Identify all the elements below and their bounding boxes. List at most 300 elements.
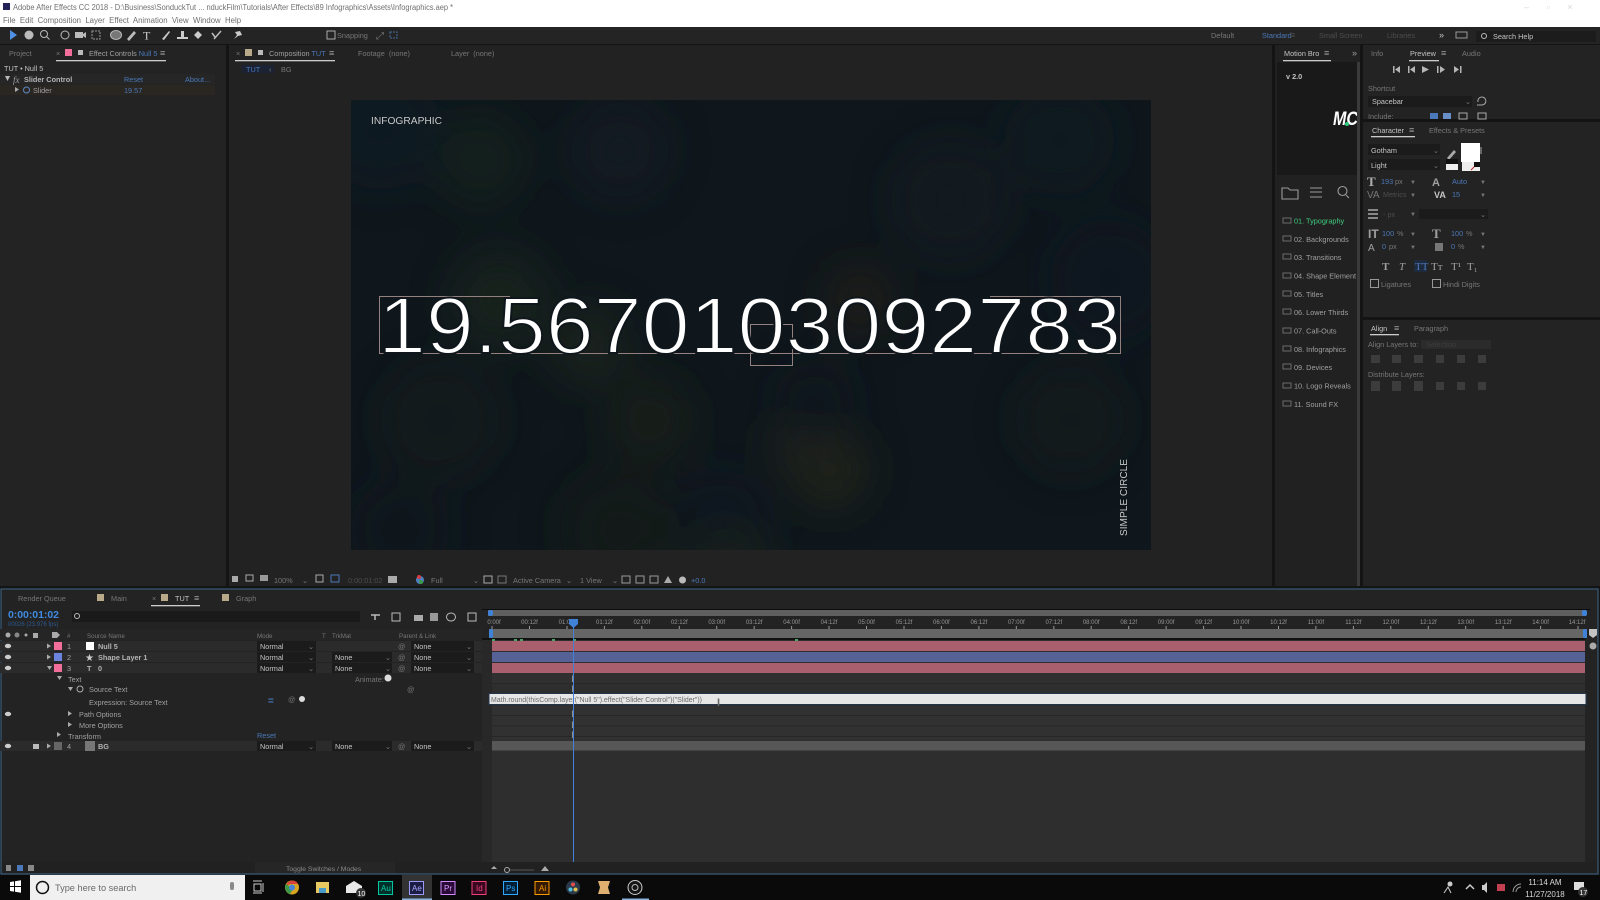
column headers: Mode [257, 633, 273, 640]
tabs: Preview [1410, 49, 1437, 58]
mail: 10 [358, 891, 365, 898]
layer tab: Layer (none) [451, 49, 494, 58]
tabs: Info [1371, 49, 1383, 58]
app: indesign: Id [476, 884, 483, 893]
time ruler: 12:12f [1420, 620, 1437, 626]
composition tab: × [236, 49, 240, 58]
panel: effect controls: About... [185, 75, 210, 84]
stroke row [1368, 209, 1488, 219]
time ruler: 05:00f [858, 620, 875, 626]
column headers: T [322, 633, 326, 640]
layer 4: bg: ⌄ [385, 742, 391, 751]
property rows: Text [68, 675, 81, 684]
keyframe markers: I [572, 730, 574, 740]
type style buttons: T₁ [1467, 261, 1478, 273]
viewer controls: 0:00:01:02 [348, 576, 382, 585]
expression field [489, 694, 1586, 704]
size and leading: T [1367, 174, 1376, 189]
time ruler: 14:00f [1532, 620, 1549, 626]
viewer controls: Full [431, 576, 443, 585]
type style buttons: T [1382, 261, 1390, 273]
size and leading: ▼ [1410, 193, 1416, 199]
layer 2: shape layer 1 [0, 652, 482, 664]
timeline tabs: ≡ [194, 593, 199, 603]
column headers [0, 629, 482, 640]
taskbar [0, 875, 1600, 900]
chrome [285, 880, 299, 894]
property rows: Path Options [79, 710, 122, 719]
layer 3: text layer: 0 [98, 664, 102, 673]
slider control row [0, 74, 215, 84]
layer 1: null 5 [0, 641, 482, 651]
time ruler: 08:00f [1083, 620, 1100, 626]
panel: preview: ⌄ [1465, 97, 1471, 106]
time ruler: 00:12f [521, 620, 538, 626]
layer 1: null 5: Null 5 [98, 642, 118, 651]
layer 3: text layer: ⌄ [466, 664, 472, 673]
timeline tabs: Render Queue [18, 594, 66, 603]
keyframe markers: I [572, 684, 574, 694]
app: gold tile [598, 881, 610, 894]
tabs [1371, 48, 1481, 61]
tabs [1371, 125, 1485, 137]
template list: 09. Devices [1294, 363, 1332, 372]
layer 1: null 5: None [414, 642, 431, 651]
tabs: ≡ [1394, 323, 1399, 333]
colour swatches [1446, 143, 1482, 171]
layer 3: text layer: None [335, 664, 352, 673]
composition tab [235, 48, 335, 61]
layer 2: shape layer 1: ⌄ [308, 653, 314, 662]
keyframe markers: I [572, 720, 574, 730]
big number: 19.5670103092783 [378, 281, 1121, 370]
scale rows: ▼ [1410, 245, 1416, 251]
scale rows: 0 [1451, 242, 1455, 251]
viewer controls: ⌄ [473, 576, 479, 585]
template list: 04. Shape Element [1294, 272, 1356, 280]
type style buttons [1382, 260, 1478, 273]
app: illustrator: Ai [539, 884, 546, 893]
breadcrumb [242, 65, 292, 74]
viewer controls: ⌄ [302, 576, 308, 585]
size and leading: ▼ [1480, 180, 1486, 186]
property rows: More Options [79, 721, 123, 730]
property rows: Transform [68, 732, 101, 741]
template list: 10. Logo Reveals [1294, 382, 1351, 390]
expression field: Math.round(thisComp.layer("Null 5").effect("Slider Control")("Slider")) [491, 695, 702, 704]
layer 4: bg: Normal [260, 742, 284, 751]
breadcrumb: BG [281, 65, 292, 74]
size and leading: 193 [1381, 177, 1393, 186]
panel: align: Selection [1426, 340, 1456, 349]
breadcrumb: TUT [246, 65, 261, 74]
timeline tabs: Main [111, 594, 127, 603]
time ruler: 0:00f [487, 620, 501, 626]
scale rows [1368, 226, 1486, 254]
layer bars [492, 641, 1585, 750]
stroke row: - px [1383, 210, 1396, 219]
size and leading: VA [1434, 190, 1446, 200]
distribute layers: Distribute Layers: [1368, 370, 1425, 379]
tool icons [1282, 186, 1349, 199]
time navigator [482, 609, 1590, 616]
tab: » [1352, 48, 1357, 58]
template list: 05. Titles [1294, 290, 1324, 299]
size and leading: Metrics [1383, 190, 1407, 199]
top toolbar [0, 27, 1600, 44]
comp viewer: blurred bokeh background [351, 100, 1151, 550]
template list: 06. Lower Thirds [1294, 308, 1349, 317]
viewer controls: +0.0 [691, 576, 705, 585]
viewer controls: 1 View [580, 576, 602, 585]
column headers: Parent & Link [399, 633, 437, 640]
scale rows: % [1397, 229, 1404, 238]
layer 4: bg: ⌄ [466, 742, 472, 751]
property rows: Animate: [355, 675, 384, 684]
top toolbar: Search Help [1493, 32, 1533, 41]
system tray: 11/27/2018 [1525, 890, 1565, 899]
layer 2: shape layer 1: Shape Layer 1 [98, 653, 147, 662]
layer 3: text layer: ⌄ [308, 664, 314, 673]
top toolbar: Small Screen [1319, 31, 1362, 40]
notifications [1574, 882, 1584, 890]
search box: Type here to search [55, 883, 136, 893]
panel: character: ⌄ [1433, 161, 1439, 170]
panel: timeline [0, 589, 1598, 874]
viewer controls: ⌄ [566, 576, 572, 585]
tab [1283, 48, 1357, 61]
time ruler [487, 620, 1586, 629]
time ruler: 08:12f [1120, 620, 1137, 626]
time ruler: 01:00f [559, 620, 576, 626]
layer outlines [380, 296, 1120, 366]
layer path: TUT • Null 5 [4, 64, 43, 73]
type style buttons: T [1399, 261, 1406, 273]
viewer controls: Active Camera [513, 576, 562, 585]
tool icons [10, 28, 242, 42]
tool icons: T [143, 28, 151, 42]
scale rows: % [1466, 229, 1473, 238]
layer 2: shape layer 1: ★ [85, 653, 94, 664]
property rows: @ [407, 685, 414, 694]
bottom status bar [2, 862, 1597, 873]
tab: ≡ [1324, 48, 1329, 58]
time ruler: 13:00f [1457, 620, 1474, 626]
time ruler: 06:00f [933, 620, 950, 626]
layer 4: bg: @ [398, 742, 405, 751]
scale rows: IT [1368, 227, 1379, 241]
scale rows: % [1458, 242, 1465, 251]
bottom status bar: Toggle Switches / Modes [286, 866, 362, 873]
time ruler: 04:00f [783, 620, 800, 626]
snapping [327, 31, 335, 39]
timeline tabs: Graph [236, 594, 256, 603]
layer 3: text layer [0, 663, 482, 673]
logo area [1277, 62, 1357, 175]
size and leading: Auto [1452, 177, 1467, 186]
time ruler: 06:12f [971, 620, 988, 626]
time ruler: 02:12f [671, 620, 688, 626]
effect controls tab: Effect Controls Null 5 [89, 49, 157, 58]
time ruler: 04:12f [821, 620, 838, 626]
search box [30, 875, 245, 900]
layer 4: bg: None [414, 742, 431, 751]
timeline tabs: × [152, 594, 156, 603]
column headers: Source Name [87, 633, 125, 640]
layer 3: text layer: 3 [67, 664, 71, 673]
panel: character: Hindi Digits [1443, 280, 1480, 289]
start button [10, 880, 21, 893]
font weight [1368, 159, 1440, 170]
panel: effect controls: 19.57 [124, 86, 142, 95]
panel: character: Light [1371, 161, 1387, 170]
layer 2: shape layer 1: @ [398, 653, 405, 662]
app: obs [622, 880, 649, 900]
panel: character: Ligatures [1381, 280, 1411, 289]
brand: simple circle: SIMPLE CIRCLE [1118, 459, 1130, 536]
effect controls tab: × [56, 49, 60, 58]
track area [482, 640, 1585, 862]
property rows: Reset [257, 731, 276, 740]
scrollbar [1357, 62, 1360, 586]
system tray [1444, 878, 1588, 899]
viewer controls [232, 575, 705, 585]
panel: effect controls: Slider [33, 86, 52, 95]
align layers to: Align Layers to: [1368, 340, 1418, 349]
include: Include: [1368, 112, 1394, 121]
effect controls tab [56, 48, 166, 61]
version: v 2.0 [1286, 72, 1302, 81]
mail [346, 881, 366, 898]
top toolbar: Standard [1262, 31, 1292, 40]
font family [1368, 144, 1440, 155]
scale rows: ▼ [1480, 245, 1486, 251]
template list: 02. Backgrounds [1294, 235, 1349, 244]
layer 2: shape layer 1: None [335, 653, 352, 662]
time ruler: 01:12f [596, 620, 613, 626]
panel: character: ⌄ [1433, 146, 1439, 155]
panel: character [1363, 122, 1600, 317]
property rows [5, 674, 414, 741]
panel: effect controls: fx [13, 75, 20, 85]
distribute icons [1371, 381, 1486, 391]
layer 2: shape layer 1: None [414, 653, 431, 662]
time ruler: 12:00f [1382, 620, 1399, 626]
time ruler: 09:12f [1195, 620, 1212, 626]
playhead [569, 619, 578, 862]
property rows: @ [288, 695, 295, 704]
layer 1: null 5: ⌄ [466, 642, 472, 651]
panel: effect controls [0, 45, 226, 586]
workspaces: Default [1211, 31, 1234, 40]
transport controls [1393, 66, 1462, 73]
system tray: 17 [1580, 890, 1587, 897]
time ruler: 03:12f [746, 620, 763, 626]
top toolbar: » [1439, 30, 1444, 40]
template list: 01. Typography [1294, 216, 1345, 226]
right edge markers [1589, 629, 1597, 650]
layer 2: shape layer 1: ⌄ [466, 653, 472, 662]
scale rows: ▼ [1410, 232, 1416, 238]
template list: 03. Transitions [1294, 253, 1342, 262]
tabs: Effects & Presets [1429, 126, 1485, 135]
keyframe markers [572, 674, 574, 740]
layer 1: null 5: ⌄ [308, 642, 314, 651]
align icons [1371, 355, 1486, 363]
stroke row: ⌄ [1480, 210, 1486, 219]
app: resolve [566, 880, 580, 894]
top toolbar: Libraries [1387, 31, 1415, 40]
stroke row: ▼ [1410, 212, 1416, 218]
property rows: = [268, 696, 274, 707]
layer 4: bg: ⌄ [308, 742, 314, 751]
composition tab: ≡ [329, 48, 334, 58]
time ruler: 09:00f [1158, 620, 1175, 626]
size and leading: VA [1367, 190, 1380, 201]
scale rows: 0 [1382, 242, 1386, 251]
search help [1476, 31, 1596, 42]
column headers: # [67, 633, 71, 640]
layer 2: shape layer 1: ⌄ [385, 653, 391, 662]
layer search [72, 611, 360, 622]
viewer controls: 100% [274, 576, 293, 585]
layer 3: text layer: @ [398, 664, 405, 673]
keyframe markers: I [572, 709, 574, 719]
file explorer [316, 882, 329, 893]
ligatures option [1370, 280, 1378, 288]
tabs: ≡ [1409, 125, 1414, 135]
layer 4: bg: None [335, 742, 352, 751]
project tab: Project [9, 49, 32, 58]
slider row [0, 85, 215, 95]
template list: 08. Infographics [1294, 345, 1346, 354]
column headers: TrkMat [332, 633, 351, 640]
layer 4: bg: BG [98, 742, 109, 751]
scale rows: T [1432, 226, 1441, 241]
type style buttons: T¹ [1451, 261, 1461, 273]
panel: composition [229, 45, 1272, 615]
layer 3: text layer: Normal [260, 664, 284, 673]
scale rows: 100 [1451, 229, 1463, 238]
top toolbar: Snapping [337, 31, 368, 40]
keyframe markers: I [572, 674, 574, 684]
viewer controls: ⌄ [612, 576, 618, 585]
time ruler: 05:12f [896, 620, 913, 626]
type style buttons: TT [1415, 261, 1429, 273]
property rows: Expression: Source Text [89, 698, 168, 707]
time ruler: 14:12f [1569, 620, 1586, 626]
size and leading: ▼ [1410, 180, 1416, 186]
panel: preview: Spacebar [1372, 97, 1404, 106]
size and leading: ▼ [1480, 193, 1486, 199]
tabs [1370, 323, 1448, 335]
app: photoshop: Ps [506, 884, 515, 893]
panel: effect controls: Reset [124, 75, 143, 84]
size and leading: 15 [1452, 190, 1460, 199]
timeline tabs: TUT [175, 594, 190, 603]
layer 2: shape layer 1: Normal [260, 653, 284, 662]
panel: character: Gotham [1371, 146, 1397, 155]
layer 1: null 5: 1 [67, 642, 71, 651]
app: after effects [402, 875, 432, 900]
size and leading: A [1432, 177, 1440, 189]
current time: 0:00:01:02 [8, 609, 59, 621]
template list: 11. Sound FX [1294, 400, 1338, 409]
template list: 07. Call-Outs [1294, 326, 1337, 336]
time ruler: 11:00f [1308, 620, 1324, 626]
layer 1: null 5: Normal [260, 642, 284, 651]
type style buttons: Tт [1431, 261, 1443, 273]
time ruler: 03:00f [708, 620, 725, 626]
scale rows: px [1389, 242, 1397, 251]
template list [1283, 216, 1356, 409]
time ruler: 13:12f [1495, 620, 1512, 626]
scale rows: A [1368, 243, 1375, 254]
size and leading [1367, 174, 1486, 201]
window controls: – ▫ × [1524, 2, 1572, 12]
window title: Adobe After Effects CC 2018 - D:\Business\SonduckTut ... nduckFilm\Tutorials\After Effects\89 Infographics\Assets\Infographics.aep * [13, 3, 453, 12]
hindi digits option [1432, 280, 1440, 288]
tabs: ≡ [1441, 48, 1446, 58]
task view [253, 881, 263, 893]
footage tab: Footage (none) [358, 49, 410, 58]
timeline switches [371, 613, 476, 621]
time ruler: 07:00f [1008, 620, 1025, 626]
layer 1: null 5: @ [398, 642, 405, 651]
tabs: Align [1371, 324, 1387, 333]
panel: align [1363, 320, 1600, 586]
time ruler: 02:00f [633, 620, 650, 626]
layer 3: text layer: ⌄ [385, 664, 391, 673]
title bar [0, 0, 1600, 27]
app: photoshop [504, 882, 518, 894]
top toolbar: ⤢ [376, 31, 384, 42]
layer 2: shape layer 1: 2 [67, 653, 71, 662]
time ruler: 07:12f [1045, 620, 1062, 626]
layer 3: text layer: None [414, 664, 431, 673]
app: audition: Au [381, 884, 391, 893]
heading: infographic: INFOGRAPHIC [371, 115, 442, 127]
layer 3: text layer: T [87, 664, 92, 673]
scale rows: 100 [1382, 229, 1394, 238]
panel: timeline: 00026 (23.976 fps) [8, 622, 58, 628]
app: audition [378, 882, 392, 894]
menu bar: File Edit Composition Layer Effect Animation View Window Help [3, 16, 242, 25]
clock: 11:14 AM [1528, 878, 1562, 887]
panel: motion bro [1275, 45, 1360, 586]
layer 4: bg [0, 741, 482, 751]
layer 4: bg: 4 [67, 742, 71, 751]
time ruler: 10:12f [1270, 620, 1287, 626]
app: premiere [441, 882, 455, 894]
panel: preview [1363, 45, 1600, 121]
time ruler: 11:12f [1345, 620, 1362, 626]
tab: Motion Bro [1284, 49, 1319, 58]
breadcrumb: ‹ [269, 65, 272, 74]
scale rows: ▼ [1480, 232, 1486, 238]
panel: effect controls: Slider Control [24, 75, 72, 84]
marker ticks [492, 639, 798, 641]
timeline tabs [18, 593, 256, 606]
app: after effects: Ae [412, 884, 422, 893]
tabs: Audio [1462, 49, 1481, 58]
shortcut: Shortcut [1368, 84, 1395, 93]
app icon [3, 3, 10, 10]
app: indesign [472, 882, 486, 894]
effect controls tab: ≡ [160, 48, 165, 58]
text cursor: I [717, 697, 720, 709]
time ruler: 10:00f [1233, 620, 1250, 626]
